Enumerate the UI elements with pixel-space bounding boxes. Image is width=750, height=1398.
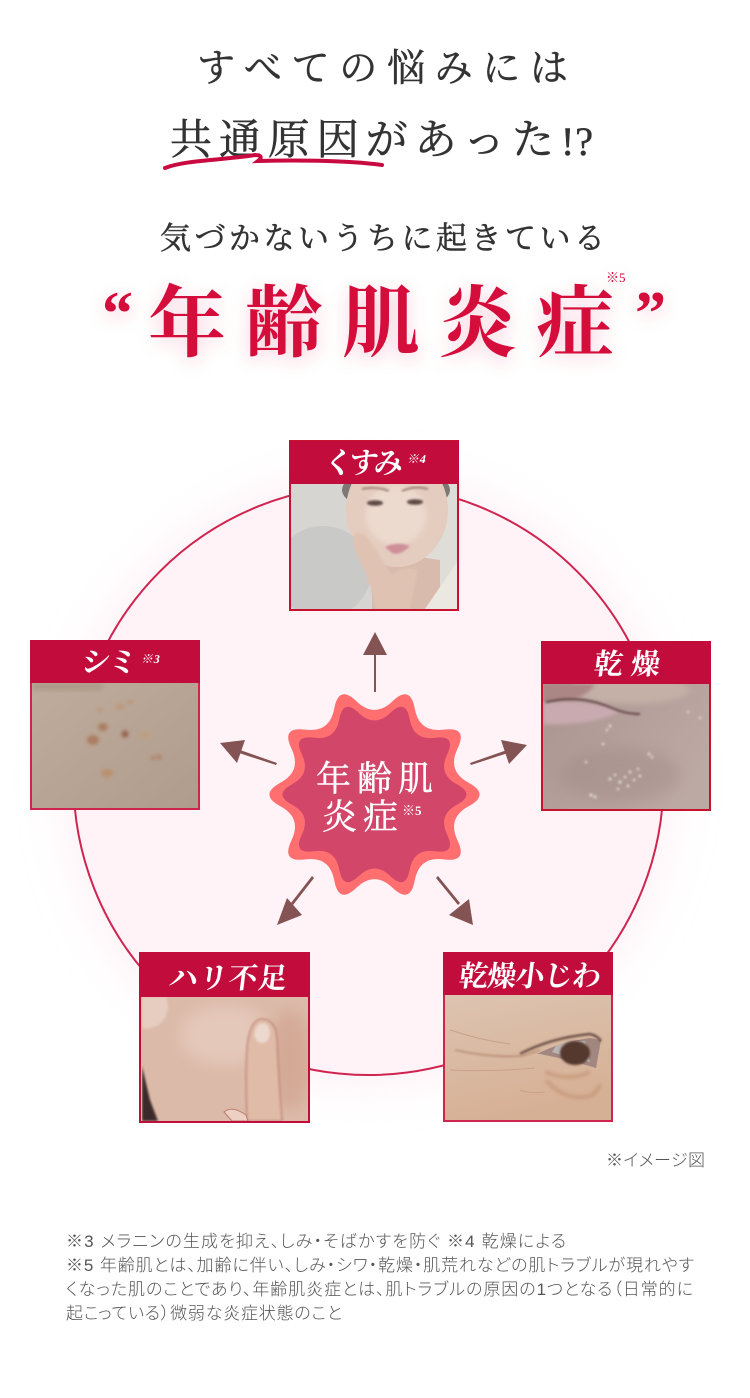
footnotes: ※5 年齢肌とは、加齢に伴い、しみ・シワ・乾燥・肌荒れなどの肌トラブルが現れやす: [66, 1256, 694, 1275]
title: first line: すべての悩みには: [197, 48, 568, 90]
footnotes: 起こっている）微弱な炎症状態のこと: [66, 1304, 342, 1323]
photo: finger on cheek: [142, 997, 312, 1121]
photo: eye with wrinkles: [450, 1030, 603, 1100]
panel: ハリ不足: [139, 952, 312, 1122]
title: second line with underline: 共通原因があった: [170, 118, 554, 164]
panel: くすみ: [289, 440, 459, 611]
subtitle: 気づかないうちに起きている: [160, 221, 605, 256]
panel: ハリ不足: ハリ不足: [167, 962, 289, 995]
panel: シミ: ※3: [140, 652, 161, 666]
arrow: lower left: [277, 876, 314, 925]
panel: くすみ: くすみ: [322, 448, 405, 480]
panel: シミ: [30, 640, 200, 809]
panel: くすみ: ※4: [406, 452, 427, 466]
headline: 年齢肌炎症: ※5: [606, 270, 626, 285]
diagram circle: [64, 475, 674, 1085]
central badge: 年齢肌炎症: 年齢肌: [316, 760, 433, 799]
central badge: 年齢肌炎症: 炎症: [322, 798, 398, 837]
photo: woman with mirror: [291, 484, 457, 609]
footnotes: くなった肌のことであり、年齢肌炎症とは、肌トラブルの原因の1つとなる（日常的に: [66, 1280, 693, 1299]
headline: 年齢肌炎症: 年齢肌炎症: [148, 280, 614, 367]
image note: ※イメージ図: [606, 1151, 705, 1170]
footnotes: [66, 1232, 694, 1323]
panel: 乾燥小じわ: 乾燥小じわ: [457, 960, 603, 993]
central badge: 年齢肌炎症: [269, 694, 480, 895]
arrow: up: [363, 632, 387, 692]
photo: dry skin near lips: [543, 684, 702, 801]
panel: 乾燥小じわ: [443, 952, 613, 1121]
central badge: 年齢肌炎症: ※5: [402, 803, 422, 818]
arrow: lower right: [436, 876, 473, 925]
arrow: left: [220, 740, 277, 765]
photo: skin with spots: [33, 683, 162, 778]
headline: 年齢肌炎症: “: [102, 280, 133, 348]
title: second line with underline: !?: [561, 119, 593, 164]
headline: 年齢肌炎症: ”: [635, 280, 666, 348]
panel: 乾燥: 乾燥: [592, 648, 662, 681]
footnotes: ※3 メラニンの生成を抑え、しみ・そばかすを防ぐ ※4 乾燥による: [66, 1232, 566, 1251]
panel: 乾燥: [541, 641, 711, 810]
panel: シミ: シミ: [79, 647, 139, 679]
arrow: right: [470, 740, 527, 765]
